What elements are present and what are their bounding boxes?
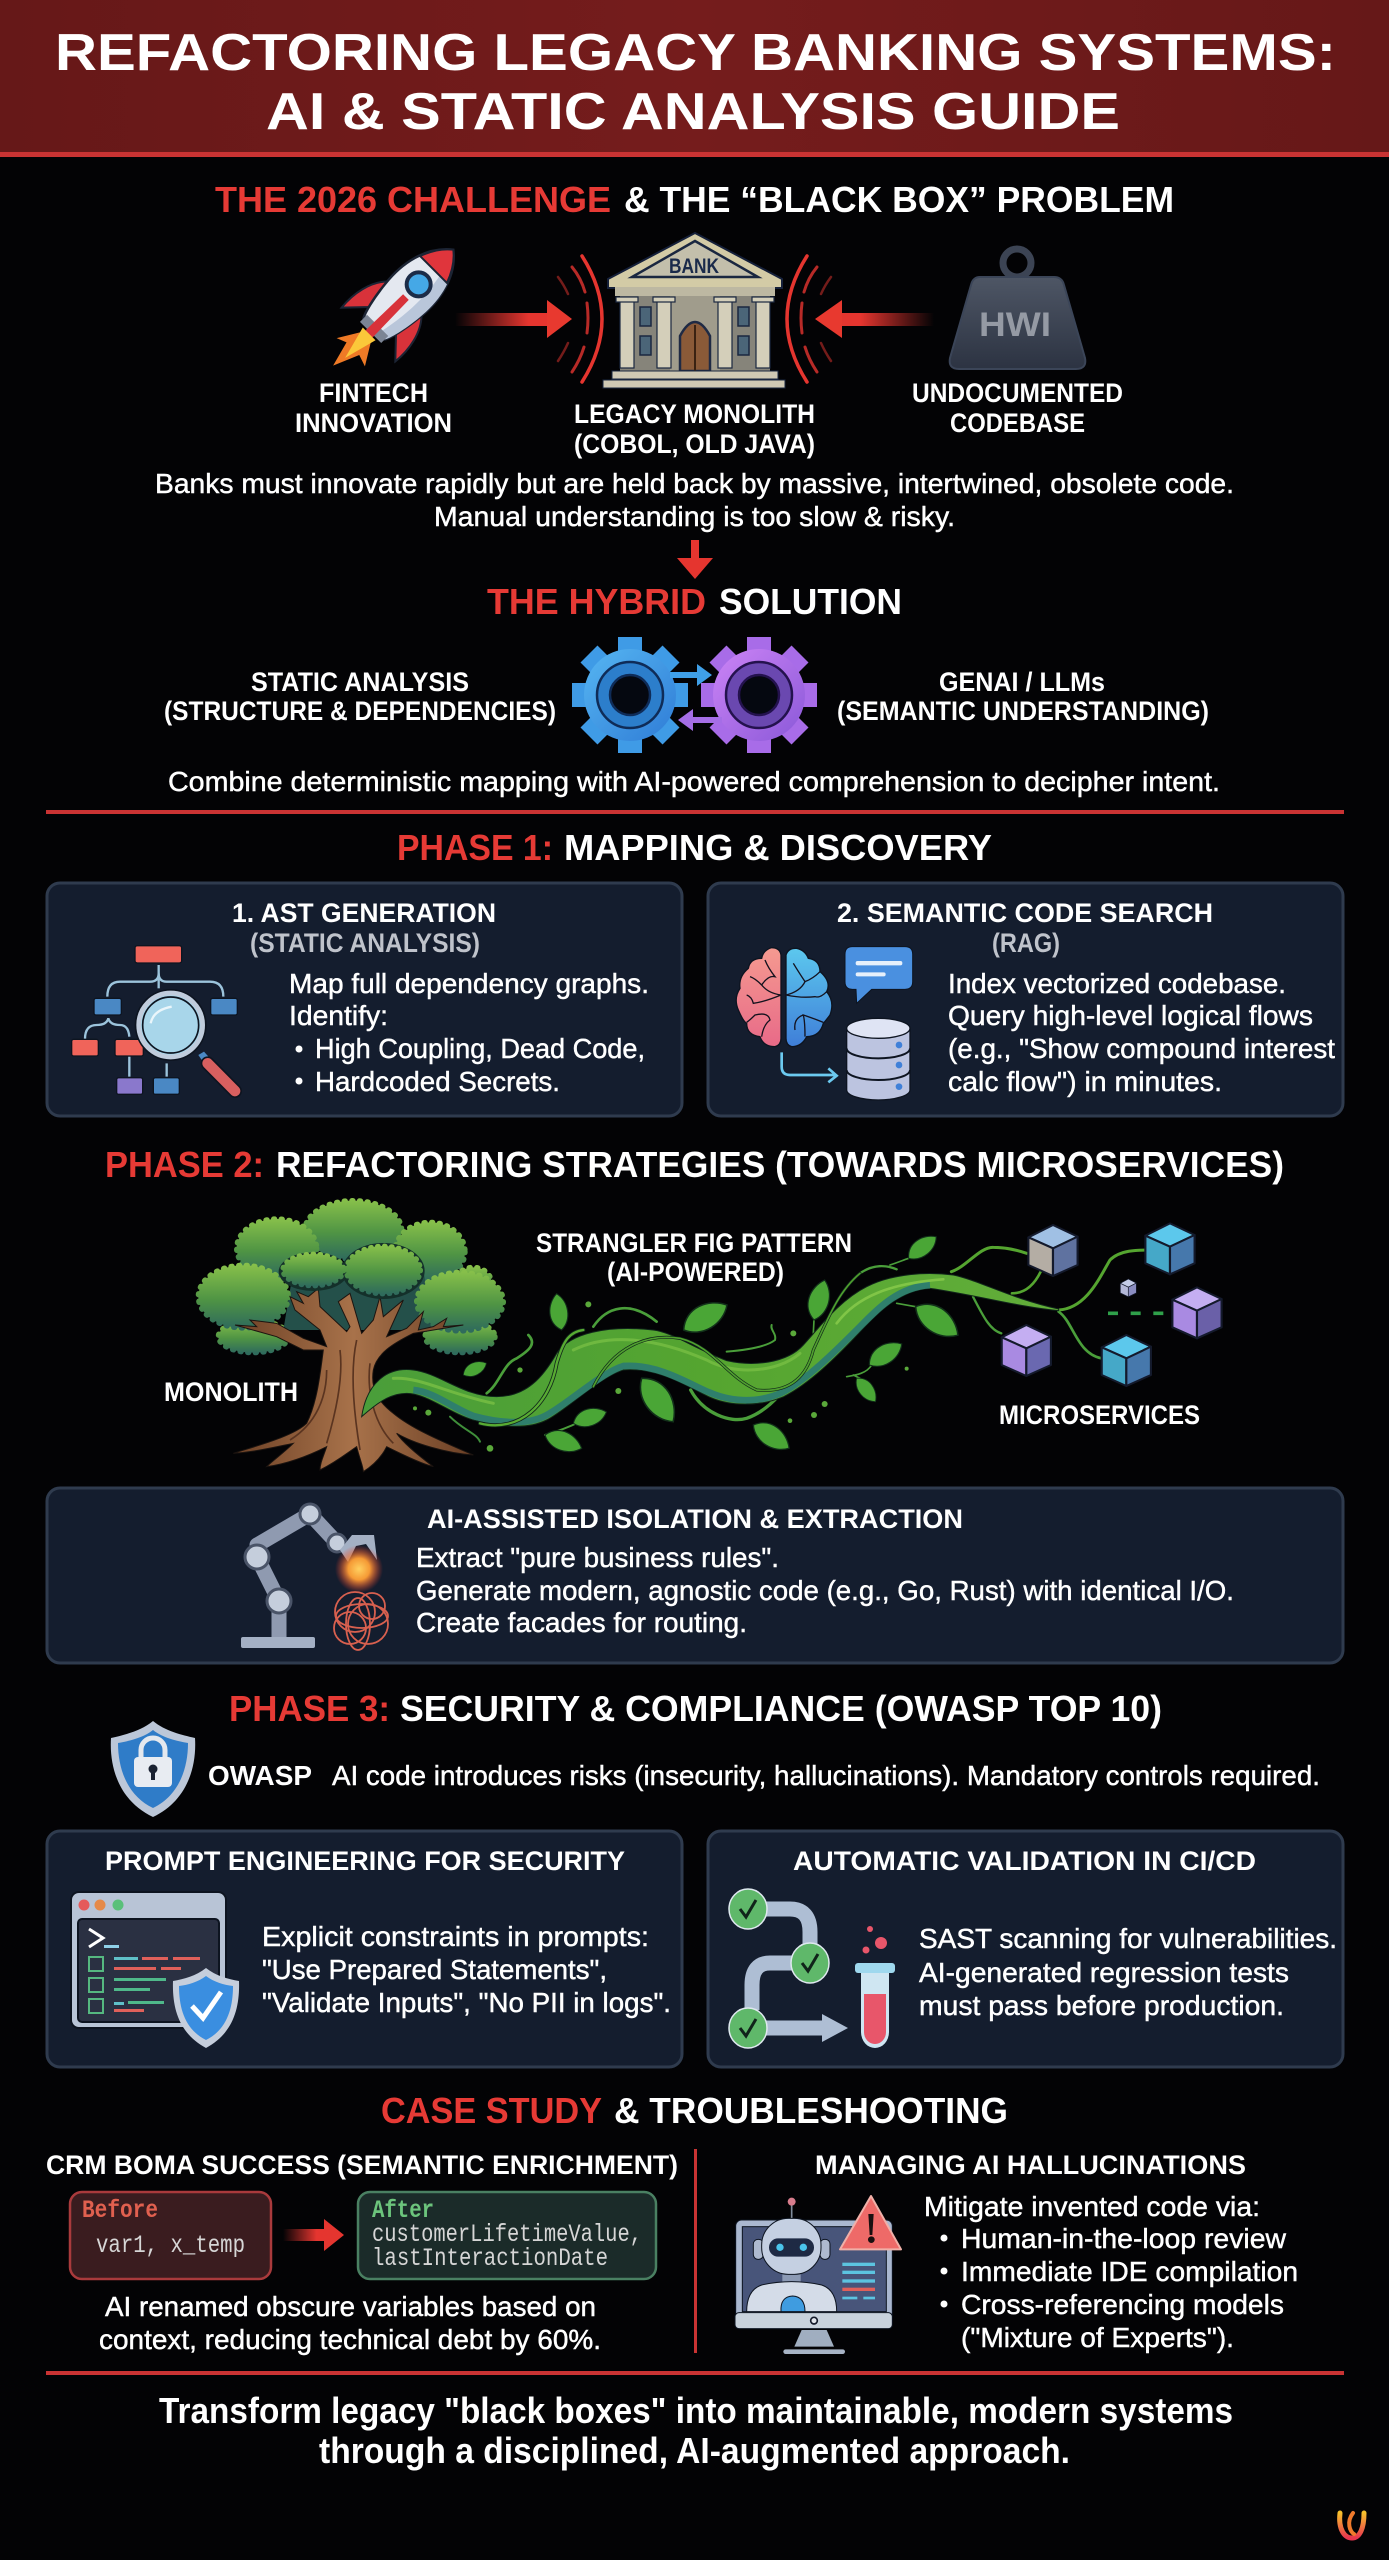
code box: after [358, 2192, 656, 2279]
code box: before [70, 2192, 271, 2279]
label: strangler fig pattern [536, 1228, 852, 1287]
card body text [262, 1921, 671, 2018]
label: genai / llms: GENAI / LLMs [939, 667, 1105, 697]
label: legacy monolith [574, 399, 815, 459]
card title: (RAG) [992, 928, 1060, 958]
card body text: Query high-level logical flows [948, 1000, 1313, 1031]
card title: AUTOMATIC VALIDATION IN CI/CD [793, 1846, 1256, 1876]
code box: after: lastInteractionDate [372, 2244, 608, 2273]
card body text: Identify: [289, 1000, 388, 1031]
label: genai / llms [837, 667, 1209, 726]
card body text: Map full dependency graphs. [289, 968, 649, 999]
icon: bank: BANK [669, 255, 719, 278]
heading: phase 2: PHASE 2: [105, 1144, 264, 1185]
sub-heading: MANAGING AI HALLUCINATIONS [815, 2150, 1246, 2180]
heading: phase 3: SECURITY & COMPLIANCE (OWASP TOP 10) [400, 1688, 1162, 1729]
card title: AI-ASSISTED ISOLATION & EXTRACTION [427, 1504, 963, 1534]
icon: terminal with shield [71, 1892, 239, 2048]
label: fintech innovation: FINTECH [319, 378, 428, 408]
label: static analysis [164, 667, 556, 726]
card body text: Hardcoded Secrets. [315, 1066, 560, 1097]
card body text: "Use Prepared Statements", [262, 1954, 607, 1985]
card body text [416, 1542, 1234, 1638]
label: undocumented codebase: UNDOCUMENTED [912, 378, 1123, 408]
icon: weight: HWI [979, 306, 1051, 344]
arrow: before to after [283, 2219, 344, 2251]
mitigation list: Immediate IDE compilation [961, 2256, 1298, 2287]
heading: phase 1: MAPPING & DISCOVERY [564, 827, 992, 868]
arrow: codebase to monolith [815, 300, 934, 338]
heading: phase 2: REFACTORING STRATEGIES (TOWARDS MICROSERVICES) [276, 1144, 1284, 1185]
icon: logo mark [1340, 2513, 1364, 2538]
mitigation list [924, 2191, 1298, 2353]
text: challenge description: Manual understanding is too slow & risky. [434, 501, 955, 532]
card title: (STATIC ANALYSIS) [250, 928, 480, 958]
leaves [460, 1230, 965, 1457]
arrow: down to solution [677, 540, 713, 579]
card body text [289, 968, 649, 1097]
closing statement: through a disciplined, AI-augmented approach. [319, 2430, 1070, 2471]
mitigation list: ("Mixture of Experts"). [961, 2322, 1234, 2353]
case study text: AI renamed obscure variables based on [105, 2291, 596, 2322]
card body text: Generate modern, agnostic code (e.g., Go, Rust) with identical I/O. [416, 1575, 1234, 1606]
card body text: must pass before production. [919, 1990, 1284, 2021]
card body text: High Coupling, Dead Code, [315, 1033, 645, 1064]
text: hybrid description: Combine deterministic mapping with AI-powered comprehension to decipher intent. [168, 766, 1220, 797]
card body text: (e.g., "Show compound interest [948, 1033, 1335, 1064]
pressure arcs [558, 256, 831, 382]
icon: robot arm [241, 1504, 388, 1650]
card body text: calc flow") in minutes. [948, 1066, 1222, 1097]
label: legacy monolith: (COBOL, OLD JAVA) [574, 429, 815, 459]
icon: pipeline and test tube [729, 1889, 895, 2048]
panel: prompt engineering [47, 1831, 682, 2067]
text: challenge description: Banks must innovate rapidly but are held back by massive, intertwined, obsolete code. [155, 468, 1234, 499]
card body text: Explicit constraints in prompts: [262, 1921, 649, 1952]
icons: microservice cubes [1002, 1223, 1222, 1386]
card title: 1. AST GENERATION [232, 898, 496, 928]
label: microservices: MICROSERVICES [999, 1400, 1200, 1430]
case study text: context, reducing technical debt by 60%. [99, 2324, 601, 2355]
icon: bank [558, 233, 831, 388]
mitigation list: Cross-referencing models [961, 2289, 1284, 2320]
label: fintech innovation: INNOVATION [295, 408, 452, 438]
text: challenge description [155, 468, 1234, 532]
closing statement: Transform legacy "black boxes" into maintainable, modern systems [159, 2390, 1233, 2431]
heading: case study [381, 2090, 1008, 2131]
mitigation list: Mitigate invented code via: [924, 2191, 1260, 2222]
text: OWASP note: OWASP [208, 1760, 312, 1791]
icon: robot on monitor with warning [735, 2196, 901, 2354]
icon: brain, chat bubble and database [736, 947, 913, 1100]
label: static analysis: STATIC ANALYSIS [251, 667, 469, 697]
label: static analysis: (STRUCTURE & DEPENDENCIES) [164, 696, 556, 726]
panel: automatic validation [708, 1831, 1343, 2067]
title: REFACTORING LEGACY BANKING SYSTEMS: [55, 24, 1336, 82]
heading: the 2026 challenge: & THE “BLACK BOX” PROBLEM [624, 179, 1174, 220]
heading: the hybrid solution: SOLUTION [719, 581, 902, 622]
illustration: strangler fig [164, 1201, 1222, 1472]
heading: the 2026 challenge: THE 2026 CHALLENGE [215, 179, 611, 220]
mitigation list: Human-in-the-loop review [961, 2223, 1287, 2254]
card body text: AI-generated regression tests [919, 1957, 1289, 1988]
panel: managing AI hallucinations [735, 2150, 1298, 2354]
heading: case study: CASE STUDY [381, 2090, 602, 2131]
case study text [99, 2291, 601, 2355]
heading: the hybrid solution [487, 581, 902, 622]
card body text: Index vectorized codebase. [948, 968, 1286, 999]
title [55, 24, 1336, 141]
icon: OWASP shield [111, 1721, 195, 1817]
label: strangler fig pattern: (AI-POWERED) [607, 1257, 784, 1287]
card title [232, 898, 496, 958]
card title: 2. SEMANTIC CODE SEARCH [837, 898, 1213, 928]
sub-heading: CRM BOMA SUCCESS (SEMANTIC ENRICHMENT) [46, 2150, 678, 2180]
code box: before: var1, x_temp [96, 2231, 245, 2260]
icon: interlocking gears [572, 637, 817, 753]
card body text: Extract "pure business rules". [416, 1542, 779, 1573]
code box: after: After [372, 2196, 434, 2225]
card body text: Create facades for routing. [416, 1607, 747, 1638]
panel: AI-assisted isolation [47, 1488, 1343, 1663]
title: AI & STATIC ANALYSIS GUIDE [266, 83, 1120, 141]
card body text [948, 968, 1335, 1097]
label: genai / llms: (SEMANTIC UNDERSTANDING) [837, 696, 1209, 726]
code box: before: Before [82, 2196, 158, 2225]
panel: AST generation [47, 883, 682, 1116]
card body text [919, 1923, 1337, 2021]
label: undocumented codebase: CODEBASE [950, 408, 1085, 438]
card body text: "Validate Inputs", "No PII in logs". [262, 1987, 671, 2018]
label: legacy monolith: LEGACY MONOLITH [574, 399, 815, 429]
heading: case study: & TROUBLESHOOTING [614, 2090, 1008, 2131]
label: strangler fig pattern: STRANGLER FIG PATTERN [536, 1228, 852, 1258]
header banner [0, 0, 1389, 157]
heading: the 2026 challenge [215, 179, 1174, 220]
arrow: fintech to monolith [455, 300, 572, 338]
icon: weight [950, 249, 1085, 369]
panel: CRM BOMA success [46, 2150, 678, 2355]
icon: rocket [308, 222, 481, 395]
card title: PROMPT ENGINEERING FOR SECURITY [105, 1846, 625, 1876]
closing statement [159, 2390, 1233, 2471]
heading: the hybrid solution: THE HYBRID [487, 581, 706, 622]
text: OWASP note: AI code introduces risks (insecurity, hallucinations). Mandatory controls required. [332, 1760, 1320, 1791]
vine body [362, 1230, 1151, 1457]
card title [837, 898, 1213, 958]
label: fintech innovation [295, 378, 452, 438]
card body text: SAST scanning for vulnerabilities. [919, 1923, 1337, 1954]
heading: phase 1: PHASE 1: [397, 827, 553, 868]
label: monolith: MONOLITH [164, 1377, 298, 1407]
icon: tree [198, 1201, 503, 1472]
code box: after: customerLifetimeValue, [372, 2220, 642, 2249]
panel: semantic code search [708, 883, 1343, 1116]
icon: dependency graph with magnifier [72, 946, 237, 1094]
heading: phase 3: PHASE 3: [229, 1688, 390, 1729]
label: undocumented codebase [912, 378, 1123, 438]
